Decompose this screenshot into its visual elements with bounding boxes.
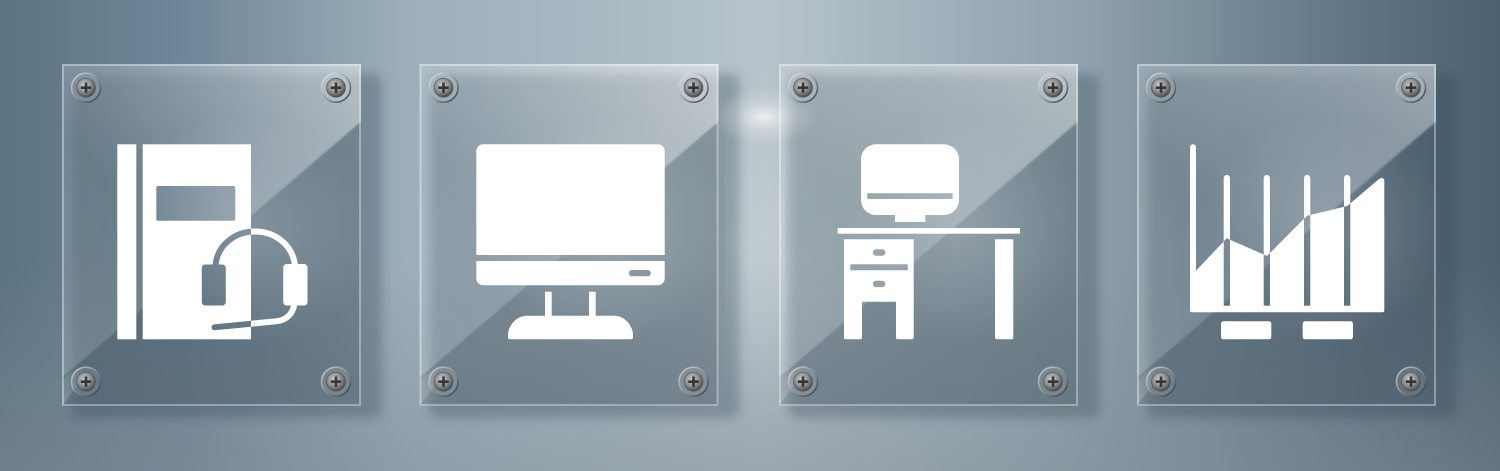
panel: office desk bbox=[776, 61, 1099, 418]
icon: desk with computer bbox=[838, 144, 1020, 339]
glass plate with screws bbox=[776, 61, 1099, 418]
panel: data chart bbox=[1134, 61, 1457, 418]
panel: support book and headset bbox=[62, 64, 386, 422]
icon: book with headset bbox=[117, 144, 308, 340]
icon: monitor bbox=[476, 144, 665, 339]
glass plate with screws bbox=[416, 61, 740, 418]
glass plate with screws bbox=[1134, 61, 1457, 418]
panel: computer monitor bbox=[416, 61, 740, 418]
glass plate with screws bbox=[59, 61, 382, 418]
light flare bbox=[712, 89, 816, 145]
icon: area chart bbox=[1190, 144, 1384, 340]
